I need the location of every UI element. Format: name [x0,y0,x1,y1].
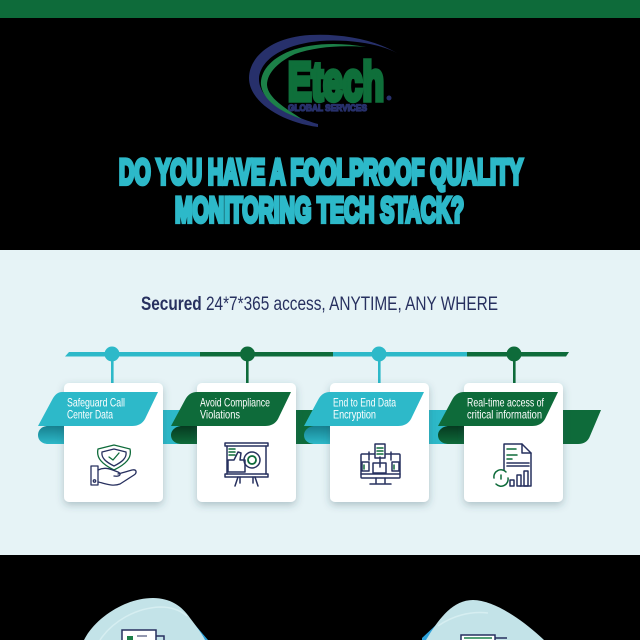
panel: benefits [0,250,640,555]
flag 3: End to End Data [333,396,396,410]
ribbon band [38,410,601,444]
flag 1: Safeguard Call [67,396,125,410]
flag 2: Violations [200,408,240,422]
flag 2 [171,392,291,426]
flag 4: Real-time access of [467,396,544,410]
icon: document right [461,635,507,640]
timeline [65,346,569,384]
flag 3 [304,392,424,426]
flag 4: critical information [467,408,542,422]
flag 4 [438,392,558,426]
subtitle: Secured 24*7*365 access, ANYTIME, ANY WHERE [141,294,498,315]
flag 2: Avoid Compliance [200,396,270,410]
icon: monitor with files [361,444,400,484]
flag 1: Center Data [67,408,113,422]
logo: Etech [288,52,384,112]
title [119,153,523,230]
flag 3: Encryption [333,408,376,422]
logo [249,35,397,127]
icon: document left [122,630,164,640]
card 1 [38,383,163,502]
card 2 [171,383,296,502]
top bar [0,0,640,18]
icon: presentation board [225,443,268,486]
card 3 [304,383,429,502]
icon: shield in hand [91,445,136,485]
flag 1 [38,392,158,426]
icon: report with chart [494,444,531,486]
logo: GLOBAL SERVICES [288,103,367,113]
blob: right [422,600,544,640]
card 4 [438,383,563,502]
blob: left [84,598,208,640]
